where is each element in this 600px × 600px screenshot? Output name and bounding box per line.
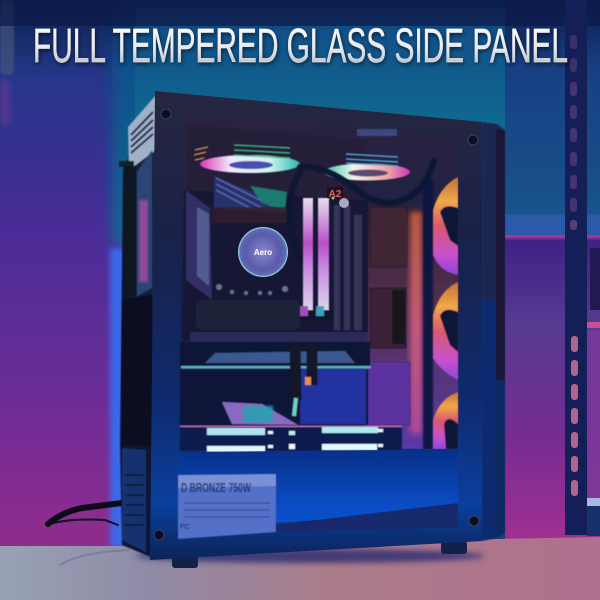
glass mounting screws [154,109,479,540]
PSU label: FC [180,524,189,531]
power cable [48,502,130,525]
CPU cooler pump: Aero [254,248,272,257]
top radiator fans [194,129,410,180]
tempered glass side panel frame [150,91,482,560]
interior window [180,113,458,450]
table top [0,537,600,600]
right chassis fans [433,177,458,449]
PSU shroud RGB strips [180,426,402,452]
debug LED readout [327,187,349,208]
front panel [482,122,505,541]
shelf rack [565,0,600,536]
case feet [172,541,467,568]
coolant tubes [289,160,434,262]
motherboard [182,125,368,342]
case rear side [119,92,158,560]
debug LED readout: A2 [329,189,342,200]
RAM sticks [300,198,333,320]
graphics card [180,342,371,425]
lower window tint [276,503,458,532]
PSU label [178,474,276,539]
PSU label: D BRONZE 750W [181,480,251,495]
PSU shroud [178,449,458,530]
CPU cooler pump [238,227,288,277]
